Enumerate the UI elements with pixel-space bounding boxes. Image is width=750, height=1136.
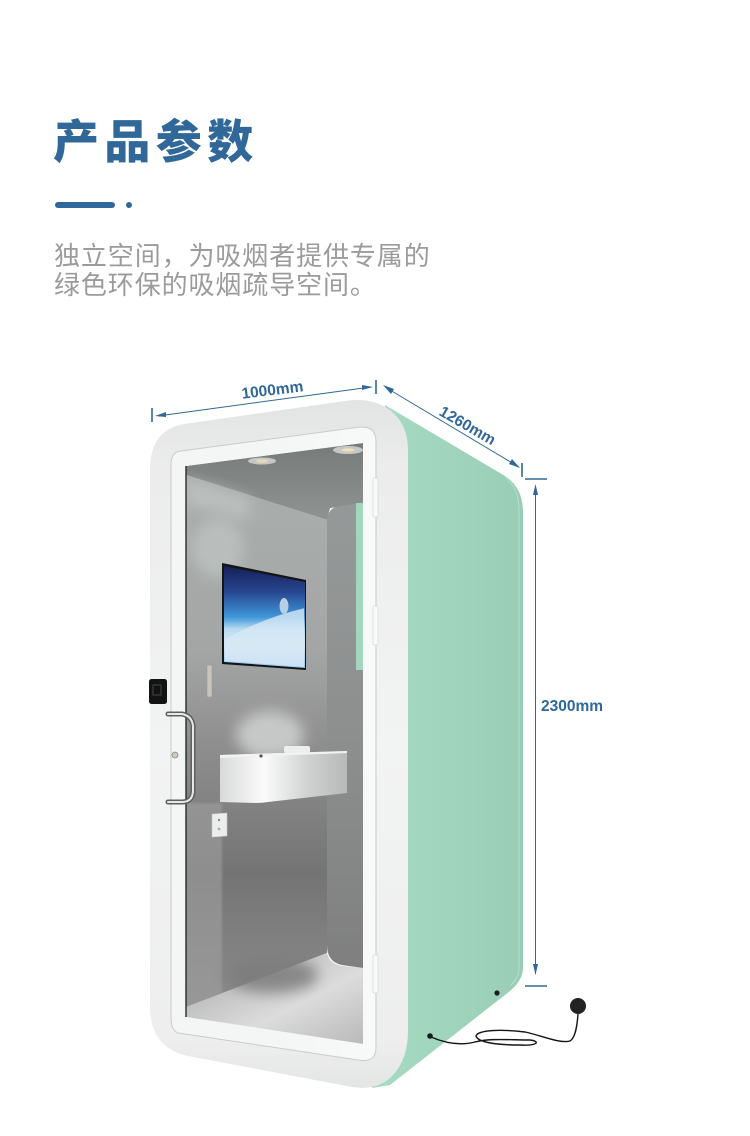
right side wall (327, 503, 363, 968)
description text: 绿色环保的吸烟疏导空间。 (54, 270, 377, 300)
door lock (149, 679, 167, 704)
side vent hole (494, 990, 500, 996)
wall power socket (212, 813, 227, 837)
back wall (186, 475, 327, 1007)
door handle (168, 714, 193, 802)
wall switch (207, 665, 212, 697)
upper wall band light (186, 478, 250, 520)
cabinet shadow on floor (226, 957, 318, 993)
dimension: width 1000mm (152, 378, 376, 422)
dimension: height 2300mm (525, 479, 603, 986)
wall shadow band (186, 803, 222, 1007)
ceiling light left (248, 458, 276, 464)
side panel edge line (505, 477, 519, 986)
dimension: depth 1260mm: 1260mm (436, 403, 498, 449)
dimension: depth 1260mm (383, 385, 522, 477)
door hinges (373, 478, 378, 993)
title: 产品参数 (53, 116, 259, 168)
description text: 独立空间，为吸烟者提供专属的 (54, 241, 431, 271)
smoking booth product (149, 400, 586, 1088)
ceiling (186, 443, 363, 520)
ceiling light right (333, 446, 363, 454)
door frame outline (171, 427, 376, 1060)
accent line and dot (55, 202, 132, 208)
wall monitor (222, 563, 306, 670)
wall-mounted sink cabinet (220, 746, 347, 803)
panel: white front frame (150, 400, 408, 1088)
glass dark edge (185, 466, 187, 1017)
door keyhole (172, 752, 178, 758)
power cable and plug (427, 998, 586, 1045)
glow above sink (236, 711, 304, 759)
dimension: width 1000mm: 1000mm (241, 378, 304, 403)
green strip reflection (356, 503, 363, 670)
floor (186, 953, 363, 1044)
panel: green side wall (372, 405, 523, 1088)
description text (54, 241, 431, 300)
dimension: height 2300mm: 2300mm (541, 698, 603, 715)
panel: interior seen through glass (186, 443, 364, 1044)
wall light glow (192, 518, 244, 578)
